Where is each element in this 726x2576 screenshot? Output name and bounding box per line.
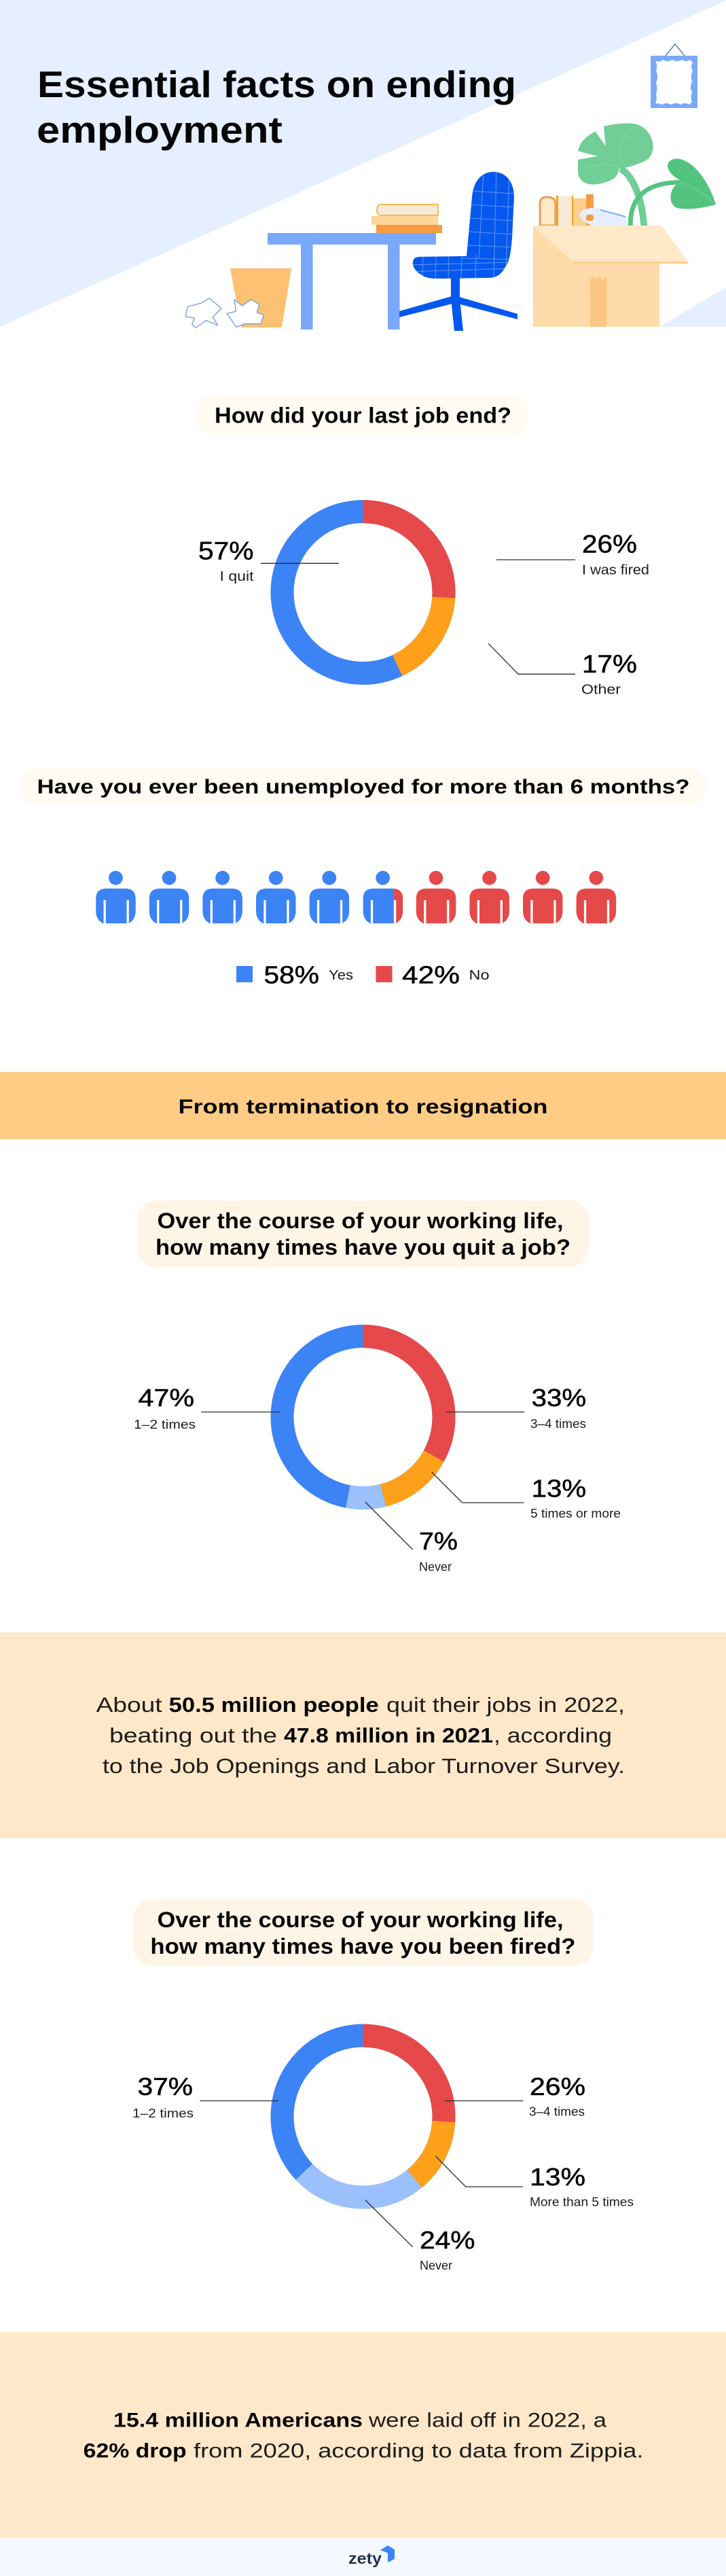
person 7 xyxy=(416,871,456,923)
callout: 50.5 million quit: beating out the xyxy=(109,1723,277,1747)
question pill: been fired xyxy=(133,1899,594,1966)
callout: 50.5 million quit: to the Job Openings and Labor Turnover Survey. xyxy=(103,1754,625,1778)
label: I was fired 26%: 26% xyxy=(582,530,637,558)
section band: From termination to resignation xyxy=(178,1096,547,1118)
callout: 50.5 million quit: 47.8 million in 2021 xyxy=(284,1723,493,1747)
icon: cardboard box xyxy=(533,226,689,327)
label: Other 17%: Other xyxy=(581,683,621,698)
icon: stack of books xyxy=(371,204,442,233)
label: I quit 57%: I quit xyxy=(220,569,254,584)
label: 1–2 times 47% xyxy=(134,1384,280,1431)
legend: yes and no: 42% xyxy=(402,961,460,989)
icon: crumpled paper xyxy=(185,298,264,328)
person 10 xyxy=(577,871,616,923)
title xyxy=(37,63,516,151)
person 9 xyxy=(523,871,562,923)
logo: zety: zety xyxy=(348,2550,382,2567)
label: Never 24%: Never xyxy=(420,2259,452,2272)
callout: 15.4 million laid off: from 2020, according to data from Zippia. xyxy=(194,2440,644,2463)
question pill: quit a job: how many times have you quit a job? xyxy=(156,1235,570,1259)
legend: yes and no xyxy=(236,961,489,989)
section band xyxy=(0,1072,726,1139)
question pill: unemployed xyxy=(21,767,706,806)
icon: office chair xyxy=(399,170,518,331)
label: 3–4 times 26% xyxy=(445,2073,585,2119)
question pill: last job xyxy=(197,396,529,435)
person 4 xyxy=(256,871,296,923)
callout: 15.4 million laid off: were laid off in 2022, a xyxy=(368,2410,606,2432)
person 1 xyxy=(96,871,136,923)
question pill: been fired: Over the course of your working life, xyxy=(158,1908,564,1932)
label: More than 5 times 13%: 13% xyxy=(530,2163,585,2191)
label: I was fired 26% xyxy=(496,530,649,578)
label: 1–2 times 37%: 1–2 times xyxy=(132,2107,194,2120)
label: 1–2 times 37% xyxy=(132,2073,278,2120)
icon: items in the box xyxy=(540,194,628,226)
callout: 15.4 million laid off: 62% drop xyxy=(84,2440,187,2463)
question pill: quit a job: Over the course of your working life, xyxy=(158,1209,564,1233)
question pill: quit a job xyxy=(137,1200,589,1267)
label: 5 times or more 13%: 5 times or more xyxy=(530,1507,621,1520)
label: Never 7%: Never xyxy=(419,1560,452,1574)
question pill: unemployed: Have you ever been unemployed for more than 6 months? xyxy=(37,776,690,798)
legend: yes and no: 58% xyxy=(264,961,319,989)
icon: picture frame xyxy=(651,44,697,108)
hero background triangle xyxy=(0,0,726,327)
label: 1–2 times 37%: 37% xyxy=(137,2073,193,2100)
callout: 50.5 million quit xyxy=(0,1632,726,1838)
label: Never 24% xyxy=(365,2200,475,2272)
icon: waste bin xyxy=(230,268,291,327)
label: More than 5 times 13%: More than 5 times xyxy=(530,2196,634,2209)
donut chart: last job end xyxy=(277,507,449,678)
callout: 50.5 million quit: quit their jobs in 2022, xyxy=(386,1693,625,1717)
footer xyxy=(0,2538,726,2576)
label: 3–4 times 33%: 33% xyxy=(532,1384,586,1412)
legend: yes and no: Yes xyxy=(329,968,353,983)
callout: 50.5 million quit: About xyxy=(96,1693,162,1717)
question pill: been fired: how many times have you been fired? xyxy=(150,1934,575,1958)
donut chart: quit a job xyxy=(253,1307,473,1527)
label: 1–2 times 47%: 47% xyxy=(139,1384,194,1412)
label: 5 times or more 13% xyxy=(432,1472,621,1520)
label: Never 7% xyxy=(365,1502,458,1574)
legend: yes and no: No xyxy=(469,968,489,983)
label: Never 24%: 24% xyxy=(420,2226,475,2254)
label: 5 times or more 13%: 13% xyxy=(532,1474,586,1502)
callout: 50.5 million quit: 50.5 million people xyxy=(169,1693,379,1717)
hero corner triangle xyxy=(659,287,726,327)
label: Never 7%: 7% xyxy=(419,1527,458,1555)
callout: 50.5 million quit: , according xyxy=(494,1723,612,1747)
label: 1–2 times 47%: 1–2 times xyxy=(134,1418,196,1431)
label: 3–4 times 26%: 3–4 times xyxy=(529,2105,585,2119)
callout: 15.4 million laid off xyxy=(0,2332,726,2538)
title: Essential facts on ending xyxy=(37,63,516,105)
hero banner xyxy=(0,0,726,331)
callout: 15.4 million laid off: 15.4 million Americans xyxy=(113,2410,363,2432)
label: 3–4 times 26%: 26% xyxy=(530,2073,585,2100)
label: 3–4 times 33%: 3–4 times xyxy=(530,1417,586,1431)
person 2 xyxy=(149,871,189,923)
label: Other 17% xyxy=(488,643,637,698)
person 8 xyxy=(469,871,509,923)
icon: desk xyxy=(268,233,436,329)
title: employment xyxy=(37,109,283,151)
label: 3–4 times 33% xyxy=(446,1384,586,1431)
label: I quit 57%: 57% xyxy=(198,537,254,565)
icon: plant xyxy=(578,123,716,226)
person 5 xyxy=(310,871,349,923)
logo: zety xyxy=(348,2545,395,2567)
label: I quit 57% xyxy=(198,537,339,584)
label: More than 5 times 13% xyxy=(435,2156,634,2209)
person 3 xyxy=(202,871,242,923)
pictogram: ten people xyxy=(96,871,616,923)
person 6 split xyxy=(363,871,403,923)
donut chart: been fired xyxy=(249,2003,477,2230)
label: I was fired 26%: I was fired xyxy=(582,563,649,578)
label: Other 17%: 17% xyxy=(582,650,637,678)
question pill: last job: How did your last job end? xyxy=(215,404,511,428)
